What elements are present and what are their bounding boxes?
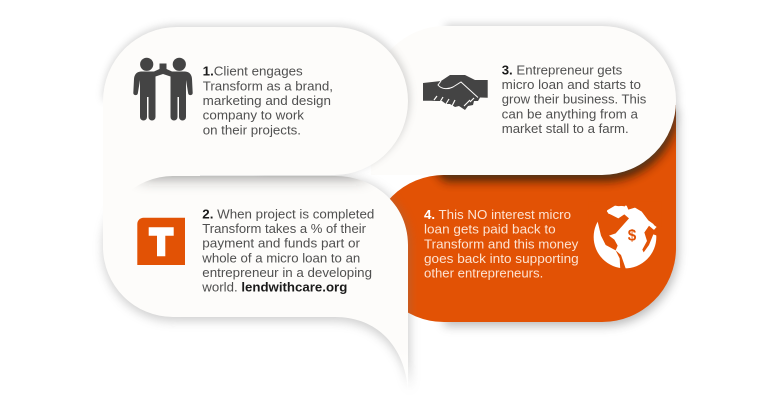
step 4 text: other entrepreneurs. [424,266,543,281]
step 4 text [424,207,579,281]
icon: globe with dollar sign: $ [628,227,637,244]
step 1 text: Transform as a brand, [203,78,333,93]
step 2 text: payment and funds part or [202,236,361,251]
step 4 text: Transform and this money [424,236,579,251]
step 2 text: whole of a micro loan to an [201,250,360,265]
icon: globe with dollar sign [588,202,662,270]
step 3 text [502,62,647,136]
step 1 text: 1.Client engages [203,64,303,79]
step 4 text: 4. This NO interest micro [424,207,571,222]
step 2 text: Transform takes a % of their [202,221,367,236]
step 1 text: company to work [203,108,304,123]
icon: handshake [423,75,488,110]
step 3 text: 3. Entrepreneur gets [502,62,623,77]
step 4 text: loan gets paid back to [424,222,556,237]
panel: step 3 white bubble [371,24,678,176]
step 3 text: grow their business. This [502,92,647,107]
icon: T logo [137,218,185,265]
step 3 text: can be anything from a [502,106,639,121]
step 1 text: marketing and design [203,93,331,108]
panel: step 4 orange bubble [390,105,684,332]
step 2 text [201,206,374,295]
panel: step 1 white bubble [103,25,410,175]
step 3 text: market stall to a farm. [502,121,629,136]
panel: step 2 white speech bubble [98,173,414,380]
step 3 text: micro loan and starts to [502,77,641,92]
step 1 text [203,64,333,137]
step 1 text: on their projects. [203,122,301,137]
step 2 text: world. lendwithcare.org [201,280,347,295]
step 4 text: goes back into supporting [424,251,579,266]
step 2 text: entrepreneur in a developing [202,265,372,280]
icon: two people [133,58,193,121]
step 2 text: 2. When project is completed [202,206,374,221]
